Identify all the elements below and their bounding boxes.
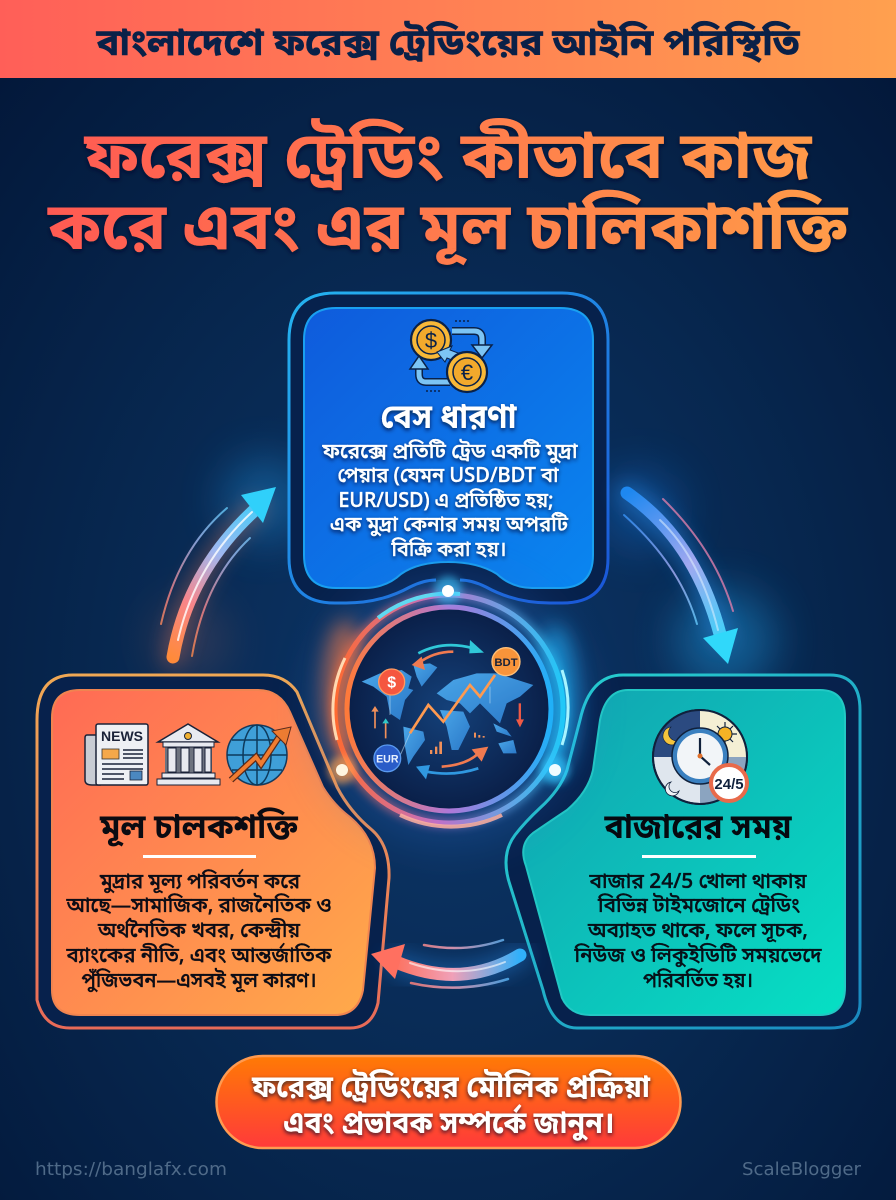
node dots [328, 576, 569, 784]
icon: newspaper: NEWS [101, 728, 143, 744]
body text [66, 868, 332, 996]
marker: BDT [492, 648, 520, 676]
marker: dollar [379, 669, 405, 695]
main title [47, 117, 849, 276]
icon: 24/5 clock: 24/5 [714, 776, 744, 793]
body text: আছে—সামাজিক, রাজনৈতিক ও [66, 893, 331, 921]
icon: currency exchange: $ [425, 328, 437, 353]
heading: মূল চালকশক্তি [99, 806, 298, 852]
body text: বিক্রি করা হয়। [391, 537, 506, 565]
button text: ফরেক্স ট্রেডিংয়ের মৌলিক প্রক্রিয়া [251, 1068, 651, 1110]
icon: currency exchange: € [461, 360, 473, 385]
body text: বাজার 24/5 খোলা থাকায় [589, 869, 807, 897]
panel: basic concept [289, 293, 608, 603]
body text: EUR/USD) এ প্রতিষ্ঠিত হয়; [338, 488, 554, 516]
body text: পেয়ার (যেমন USD/BDT বা [338, 463, 559, 491]
call to action button [216, 1056, 680, 1148]
body text: ফরেক্সে প্রতিটি ট্রেড একটি মুদ্রা [322, 439, 578, 467]
panel: market hours [506, 675, 860, 1028]
icon: currency exchange [410, 320, 492, 392]
body text: মুদ্রার মূল্য পরিবর্তন করে [99, 868, 300, 897]
footer left url: https://banglafx.com [35, 1159, 227, 1180]
world map with chart [362, 640, 533, 779]
icon: newspaper [85, 724, 148, 785]
main title: ফরেক্স ট্রেডিং কীভাবে কাজ [84, 117, 813, 205]
arrow: right card to left card [371, 940, 520, 988]
heading: বেস ধারণা [380, 397, 517, 442]
top banner [0, 0, 896, 78]
arrow: bottom-left up to top card [161, 487, 276, 657]
icon: 24/5 clock [653, 710, 747, 804]
body text [322, 439, 578, 565]
main title: করে এবং এর মূল চালিকাশক্তি [47, 188, 849, 276]
button text: এবং প্রভাবক সম্পর্কে জানুন। [284, 1103, 614, 1146]
marker: EUR: EUR [376, 753, 399, 765]
marker: EUR [374, 745, 401, 772]
body text [574, 869, 822, 996]
body text: পুঁজিভবন—এসবই মূল কারণ। [82, 968, 316, 996]
center globe [314, 574, 584, 844]
icon: central bank [157, 724, 220, 785]
body text: পরিবর্তিত হয়। [643, 967, 753, 996]
footer right brand: ScaleBlogger [742, 1159, 862, 1180]
button text [251, 1068, 651, 1146]
body text: ব্যাংকের নীতি, এবং আন্তর্জাতিক [66, 942, 332, 971]
marker: BDT: BDT [494, 657, 518, 669]
body text: অব্যাহত থাকে, ফলে সূচক, [587, 918, 808, 946]
icon: globe with rising arrow [227, 725, 291, 785]
body text: নিউজ ও লিকুইডিটি সময়ভেদে [574, 943, 822, 971]
heading: বাজারের সময় [604, 807, 792, 852]
body text: অর্থনৈতিক খবর, কেন্দ্রীয় [97, 917, 301, 946]
body text: বিভিন্ন টাইমজোনে ট্রেডিং [597, 893, 800, 921]
panel: key drivers [37, 675, 389, 1028]
arrow: top card down to right card [624, 493, 738, 664]
marker: dollar: $ [387, 675, 396, 692]
banner heading: বাংলাদেশে ফরেক্স ট্রেডিংয়ের আইনি পরিস্থিতি [95, 22, 800, 71]
body text: এক মুদ্রা কেনার সময় অপরটি [330, 512, 568, 540]
